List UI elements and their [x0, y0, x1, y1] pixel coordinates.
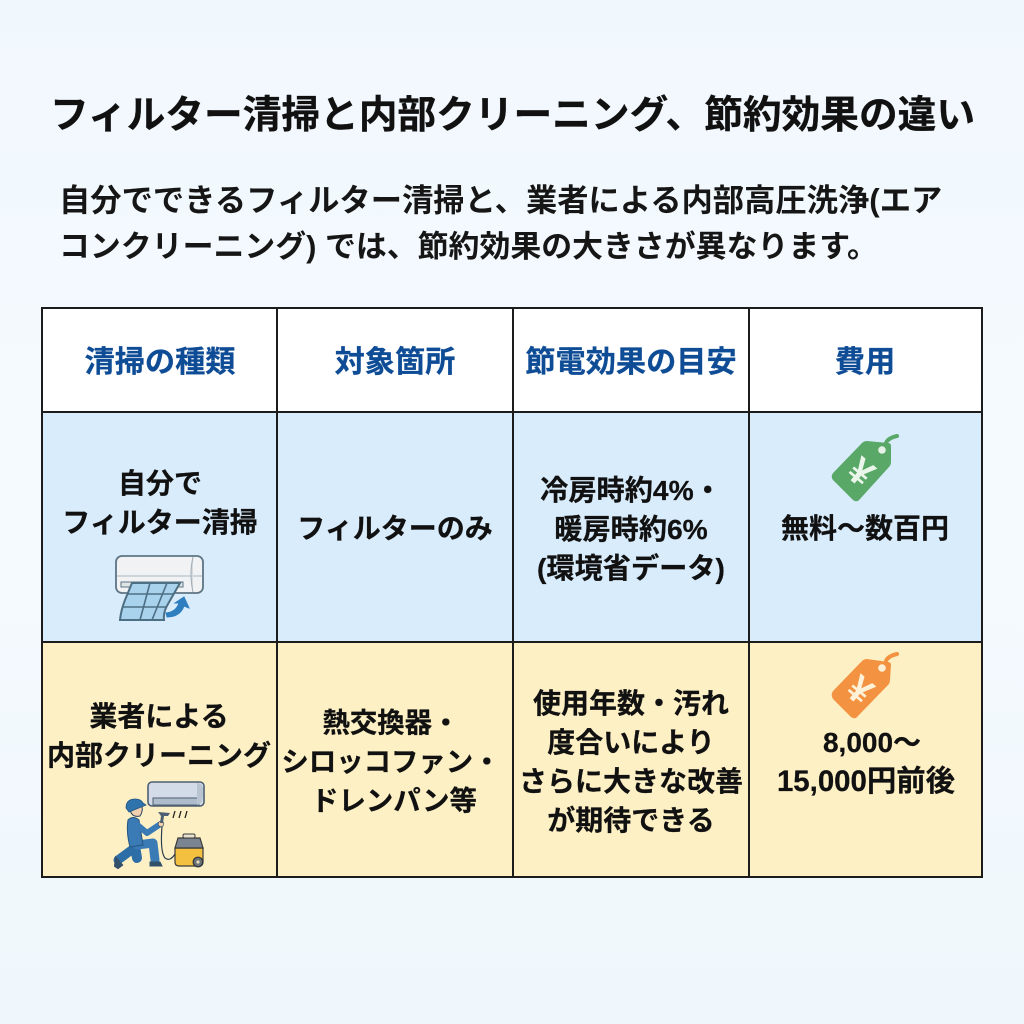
row 2 cost: 8,000〜	[823, 727, 921, 758]
row 2 target: ドレンパン等	[311, 785, 477, 816]
row 2 target	[281, 707, 501, 816]
table grid lines	[41, 307, 983, 878]
row 1 cost: 無料〜数百円	[781, 513, 949, 544]
row 1 type: 自分で	[118, 468, 202, 499]
row 2 savings: 使用年数・汚れ	[533, 688, 729, 719]
row 1 savings	[537, 474, 725, 584]
icon: orange yen price tag: ¥	[838, 668, 881, 714]
row 2 target: 熱交換器・	[323, 707, 459, 738]
row background: header	[41, 307, 983, 412]
worker figure	[115, 799, 175, 868]
row 1 savings: (環境省データ)	[537, 552, 725, 584]
row 2 type	[47, 701, 271, 771]
row 1 target: フィルターのみ	[297, 513, 493, 544]
title: フィルター清掃と内部クリーニング、節約効果の違い	[50, 94, 975, 137]
row 2 type: 内部クリーニング	[47, 740, 271, 771]
row background: self cleaning	[41, 412, 983, 642]
row 1 savings: 冷房時約4%・	[540, 474, 722, 506]
vacuum cleaner	[175, 834, 203, 867]
row 2 savings: 度合いにより	[547, 727, 715, 758]
comparison table	[41, 307, 983, 878]
icon: green yen price tag: ¥	[839, 450, 882, 496]
row 1 type	[62, 468, 258, 538]
intro text	[59, 183, 942, 264]
air conditioner unit	[148, 782, 204, 818]
row background: professional cleaning	[41, 642, 983, 878]
header: target: 対象箇所	[335, 346, 455, 379]
row 2 savings	[519, 688, 743, 836]
header: cost: 費用	[835, 346, 895, 379]
header: type: 清掃の種類	[85, 346, 235, 379]
row 2 cost	[777, 727, 955, 798]
row 2 type: 業者による	[89, 701, 229, 732]
row 2 target: シロッコファン・	[281, 746, 501, 777]
row 2 cost: 15,000円前後	[777, 765, 955, 798]
header: savings: 節電効果の目安	[525, 346, 737, 379]
row 2 savings: さらに大きな改善	[519, 766, 743, 797]
row 1 savings: 暖房時約6%	[554, 513, 708, 545]
row 1 type: フィルター清掃	[62, 507, 258, 538]
intro text: コンクリーニング) では、節約効果の大きさが異なります。	[59, 228, 878, 264]
intro text: 自分でできるフィルター清掃と、業者による内部高圧洗浄(エア	[59, 183, 942, 218]
row 2 savings: が期待できる	[547, 805, 715, 836]
